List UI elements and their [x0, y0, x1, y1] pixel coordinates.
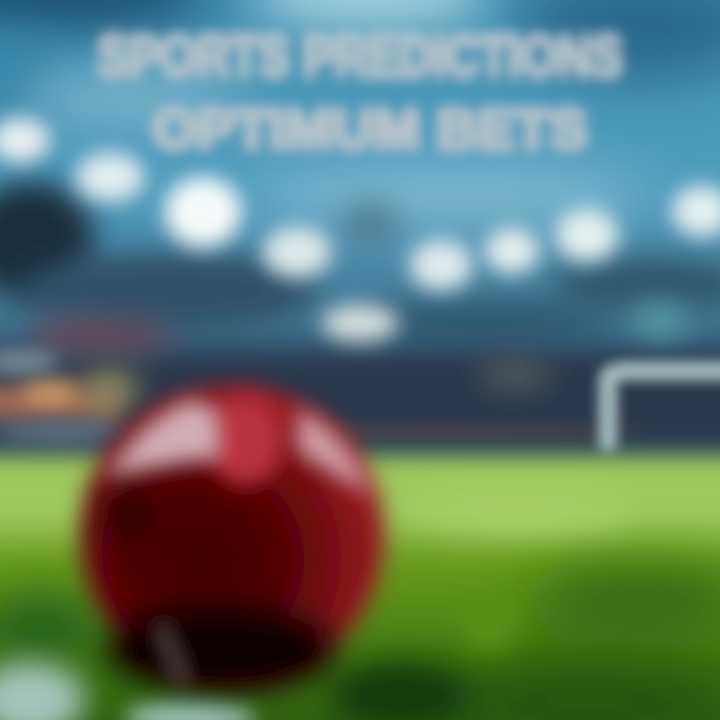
icon: goal post — [608, 371, 720, 450]
ball highlight: red top — [207, 395, 283, 485]
ball highlight: left white panel — [105, 400, 220, 480]
grass blade in front of ball — [160, 625, 185, 685]
title: OPTIMUM BETS — [152, 97, 588, 160]
title — [98, 24, 622, 160]
panel: blurred foreground at lower left — [0, 662, 255, 720]
ball highlight: right white panel — [298, 410, 372, 495]
ball shadow: dark base — [105, 608, 335, 692]
panel: stadium sky background — [0, 0, 720, 420]
panel: floodlights — [0, 118, 720, 341]
icon: red ball — [79, 385, 385, 692]
panel: dark stadium stands — [0, 180, 720, 448]
panel: grass field — [0, 456, 720, 720]
